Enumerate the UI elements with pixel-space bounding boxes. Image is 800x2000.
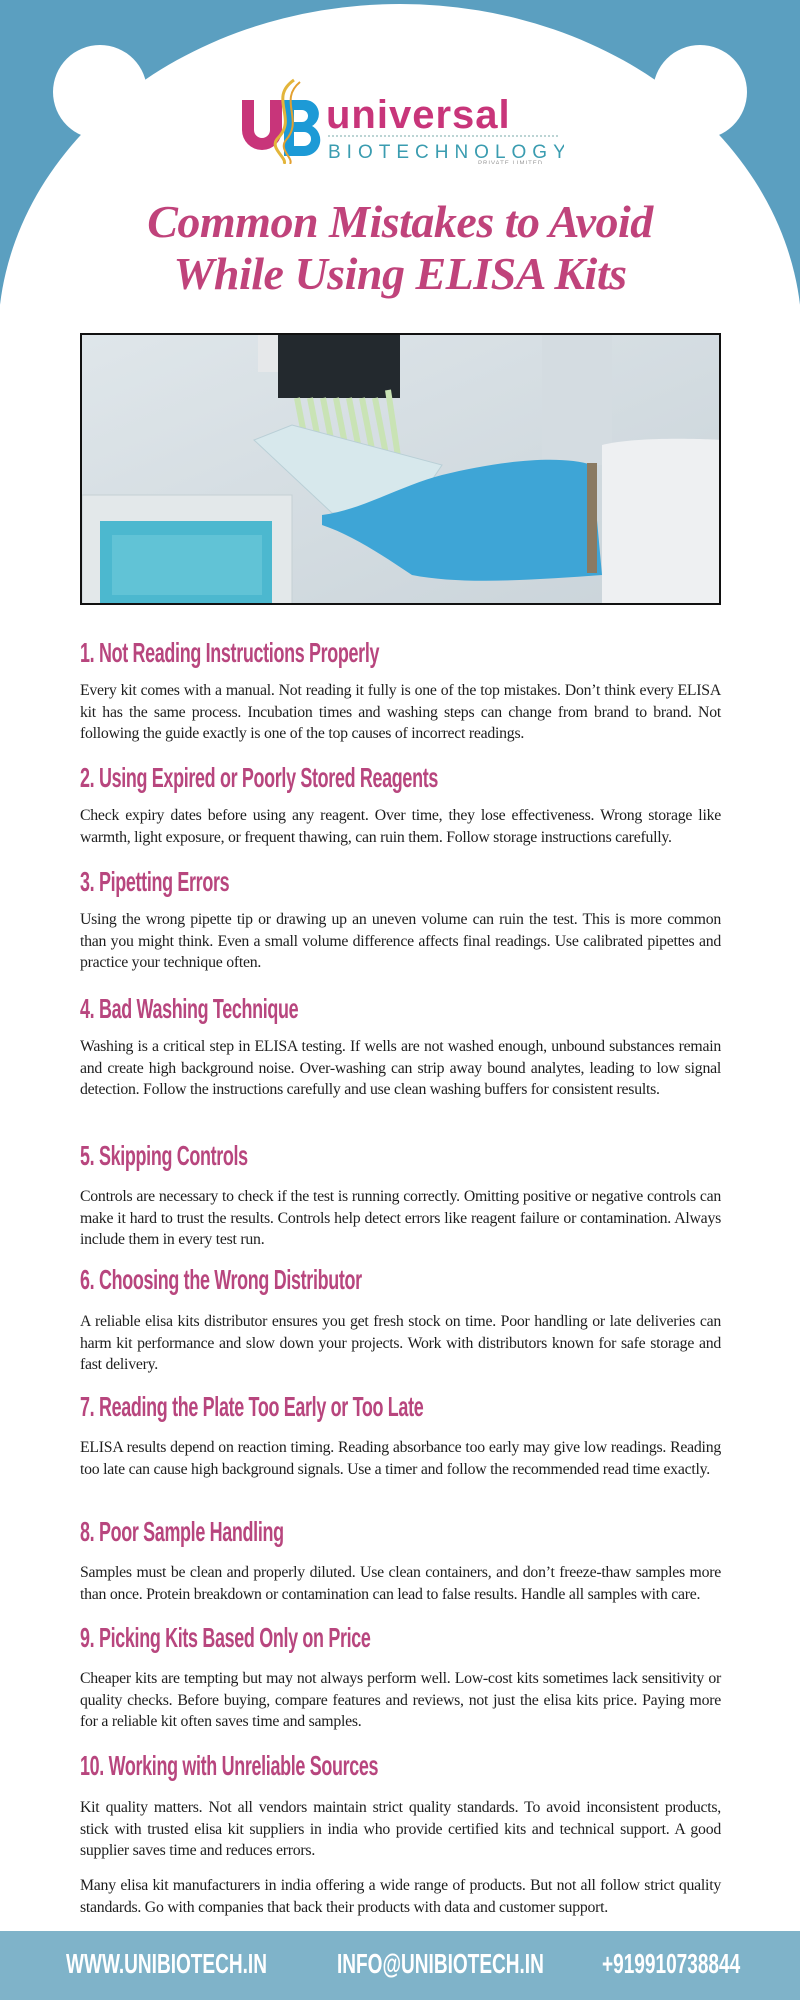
section 9 text: Cheaper kits are tempting but may not always perform well. Low-cost kits sometimes lack sensitivity or quality checks. Before buying, compare features and reviews, not just the elisa kits price. Paying more for a reliable kit often saves time and samples. <box>80 1670 721 1730</box>
closing paragraph: Many elisa kit manufacturers in india offering a wide range of products. But not all follow strict quality standards. Go with companies that back their products with data and customer support. <box>80 1877 721 1916</box>
section 6 text: A reliable elisa kits distributor ensures you get fresh stock on time. Poor handling or late deliveries can harm kit performance and slow down your projects. Work with distributors known for safe storage and fast delivery. <box>80 1313 721 1373</box>
section 2 text: Check expiry dates before using any reagent. Over time, they lose effectiveness. Wrong storage like warmth, light exposure, or frequent thawing, can ruin them. Follow storage instructions carefully. <box>80 807 721 846</box>
section 2 heading: 2. Using Expired or Poorly Stored Reagents <box>80 762 438 793</box>
section 4 text: Washing is a critical step in ELISA testing. If wells are not washed enough, unbound substances remain and create high background noise. Over-washing can strip away bound analytes, leading to low signal detection. Follow the instructions carefully and use clean washing buffers for consistent results. <box>80 1038 721 1098</box>
section 8 heading: 8. Poor Sample Handling <box>80 1516 284 1547</box>
section 10 heading: 10. Working with Unreliable Sources <box>80 1750 378 1781</box>
section 1 heading: 1. Not Reading Instructions Properly <box>80 637 379 668</box>
footer: phone: +919910738844 <box>602 1948 740 1979</box>
footer <box>0 1931 800 2000</box>
section 1 text: Every kit comes with a manual. Not reading it fully is one of the top mistakes. Don’t think every ELISA kit has the same process. Incubation times and washing steps can change from brand to brand. Not following the guide exactly is one of the top causes of incorrect readings. <box>80 682 721 742</box>
footer: website: WWW.UNIBIOTECH.IN <box>66 1948 267 1979</box>
section 5 text: Controls are necessary to check if the test is running correctly. Omitting positive or negative controls can make it hard to trust the results. Controls help detect errors like reagent failure or contamination. Always include them in every test run. <box>80 1188 721 1248</box>
title: Common Mistakes to Avoid <box>147 196 653 247</box>
section 7 text: ELISA results depend on reaction timing. Reading absorbance too early may give low readings. Reading too late can cause high background signals. Use a timer and follow the recommended read time exactly. <box>80 1439 721 1478</box>
photo: lab pipetting <box>80 333 721 605</box>
title <box>147 196 654 299</box>
section 9 heading: 9. Picking Kits Based Only on Price <box>80 1622 371 1653</box>
logo: universal <box>326 93 511 137</box>
title: While Using ELISA Kits <box>174 248 626 299</box>
logo <box>242 78 564 164</box>
section 4 heading: 4. Bad Washing Technique <box>80 993 298 1024</box>
section 6 heading: 6. Choosing the Wrong Distributor <box>80 1264 362 1295</box>
section 7 heading: 7. Reading the Plate Too Early or Too Late <box>80 1391 423 1422</box>
section 8 text: Samples must be clean and properly diluted. Use clean containers, and don’t freeze-thaw samples more than once. Protein breakdown or contamination can lead to false results. Handle all samples with care. <box>80 1564 721 1603</box>
footer: email: INFO@UNIBIOTECH.IN <box>337 1948 544 1979</box>
icon: U B with DNA <box>242 80 320 164</box>
section 3 text: Using the wrong pipette tip or drawing up an uneven volume can ruin the test. This is more common than you might think. Even a small volume difference affects final readings. Use calibrated pipettes and practice your technique often. <box>80 911 721 971</box>
section 5 heading: 5. Skipping Controls <box>80 1140 248 1171</box>
header background <box>0 0 800 304</box>
section 10 text: Kit quality matters. Not all vendors maintain strict quality standards. To avoid inconsistent products, stick with trusted elisa kit suppliers in india who provide certified kits and technical support. A good supplier saves time and reduces errors. <box>80 1799 721 1859</box>
section 3 heading: 3. Pipetting Errors <box>80 866 229 897</box>
